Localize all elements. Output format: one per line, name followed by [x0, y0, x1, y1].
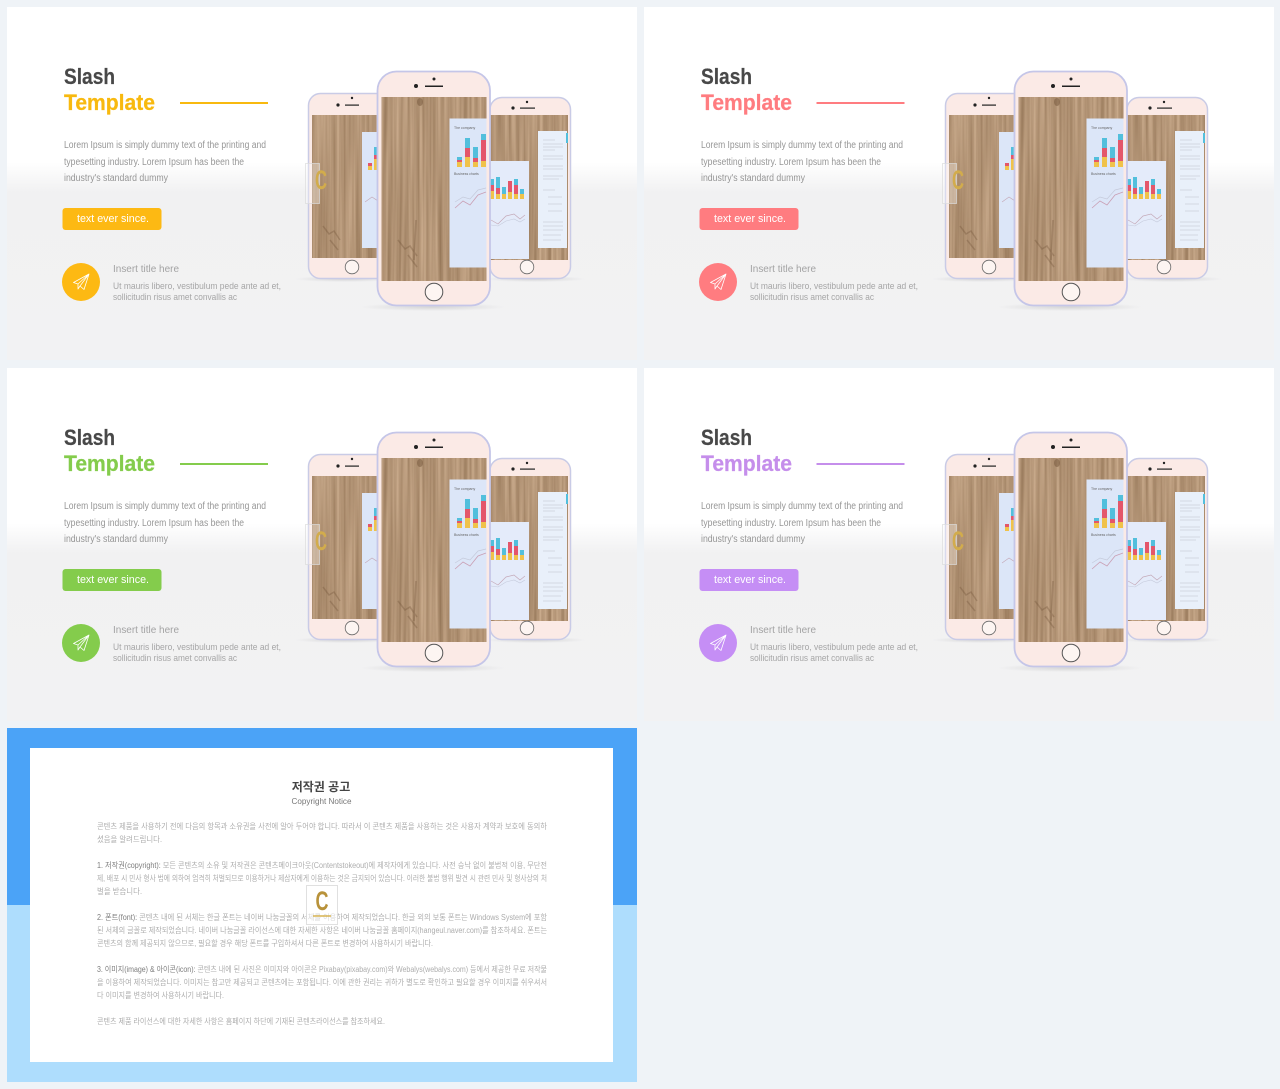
phone mockups [295, 432, 585, 672]
text: section 2 font: 콘텐츠의 함께 제공되지 않으므로, 필요할 경우 해당 폰트를 구입하셔서 다른 폰트로 변경하여 사용하시기 바랍니다. [97, 938, 433, 948]
heading: copyright notice: 저작권 공고 [292, 779, 350, 794]
icon: paper plane [62, 624, 100, 662]
body text: typesetting industry. Lorem Ipsum has been the [64, 518, 244, 529]
text: section 2 font: 2. 폰트(font): 콘텐츠 내에 된 서체는 한글 폰트는 네이버 나눔글꼴의 서체를 이용하여 제작되었습니다. 한글 외의 보통 폰트는 Windows System에 포함 [97, 912, 548, 922]
text: section 1 copyright [97, 860, 547, 896]
body text [701, 501, 903, 545]
button [62, 208, 162, 230]
caption text [750, 263, 918, 303]
body text: typesetting industry. Lorem Ipsum has been the [64, 157, 244, 168]
caption text: Insert title here [113, 263, 179, 275]
heading: Slash Template yellow [64, 64, 155, 115]
heading: Slash Template coral [701, 64, 792, 115]
icon: paper plane [699, 624, 737, 662]
button: text ever since. [714, 213, 786, 225]
panel: slide yellow [7, 7, 637, 360]
heading: Slash Template purple: Template [701, 451, 792, 476]
button: text ever since. [77, 213, 149, 225]
body text: industry's standard dummy [701, 173, 805, 184]
button: text ever since. [714, 574, 786, 586]
text: section 3 image and icon: 3. 이미지(image) & 아이콘(icon): 콘텐츠 내에 된 사진은 이미지와 아이콘은 Pixabay(pixabay.com)와 Webalys(webalys.com) 등에서 제공한 무료 저작물 [97, 964, 547, 974]
heading: Slash Template coral: Slash [701, 64, 752, 89]
text: introduction [97, 821, 548, 844]
body text: typesetting industry. Lorem Ipsum has been the [701, 157, 881, 168]
caption text: sollicitudin risus amet convallis ac [750, 653, 874, 664]
caption text: Ut mauris libero, vestibulum pede ante ad et, [750, 642, 918, 653]
text: section 1 copyright: 벌을 받습니다. [97, 886, 142, 896]
body text: industry's standard dummy [64, 534, 168, 545]
caption text [113, 624, 281, 664]
heading: Slash Template coral: Template [701, 90, 792, 115]
body text: Lorem Ipsum is simply dummy text of the printing and [701, 140, 903, 151]
caption text: Insert title here [113, 624, 179, 636]
body text: Lorem Ipsum is simply dummy text of the printing and [701, 501, 903, 512]
watermark logo: C [316, 886, 328, 916]
heading: Slash Template yellow: Template [64, 90, 155, 115]
caption text: Ut mauris libero, vestibulum pede ante ad et, [113, 642, 281, 653]
button [700, 569, 798, 591]
text: introduction: 콘텐츠 제품을 사용하기 전에 다음의 항목과 소유권을 사전에 알아 두어야 합니다. 따라서 이 콘텐츠 제품을 사용하는 것은 사용자 계약과 보호에 동의하 [97, 821, 548, 831]
phone mockups [295, 72, 585, 311]
panel: copyright notice [7, 728, 637, 1082]
body text: Lorem Ipsum is simply dummy text of the printing and [64, 501, 266, 512]
watermark logo [306, 886, 338, 924]
body text: industry's standard dummy [701, 534, 805, 545]
accent line [816, 102, 904, 104]
heading: Slash Template purple: Slash [701, 425, 752, 450]
accent line [816, 463, 904, 465]
panel: slide purple [644, 368, 1274, 721]
phone mockups [932, 72, 1222, 311]
body text [64, 140, 266, 184]
heading: Slash Template green: Slash [64, 425, 115, 450]
text: license note: 콘텐츠 제품 라이선스에 대한 자세한 사항은 홈페이지 하단에 기재된 콘텐츠라이선스를 참조하세요. [97, 1016, 385, 1026]
caption text [750, 624, 918, 664]
caption text [113, 263, 281, 303]
caption text: Ut mauris libero, vestibulum pede ante ad et, [750, 281, 918, 292]
text: section 3 image and icon: 다 이미지를 변경하여 사용하시기 바랍니다. [97, 990, 224, 1000]
heading: Slash Template purple [701, 425, 792, 476]
caption text: Insert title here [750, 263, 816, 275]
text: section 1 copyright: 제, 배포 시 민사 형사 법에 의하여 엄격히 처벌되므로 이용하거나 제삼자에게 이용하는 것은 금지되어 있습니다. 이러한 불법 행위 발견 시 관련 민사 및 형사상의 처 [97, 873, 547, 883]
body text [701, 140, 903, 184]
caption text: Ut mauris libero, vestibulum pede ante ad et, [113, 281, 281, 292]
button: text ever since. [77, 574, 149, 586]
caption text: sollicitudin risus amet convallis ac [113, 292, 237, 303]
text: section 2 font: 된 서체의 글꼴로 제작되었습니다. 네이버 나눔글꼴 라이선스에 대한 자세한 사항은 네이버 나눔글꼴 홈페이지(hangeul.naver.com)를 참조하세요. 폰트는 [97, 925, 547, 935]
caption text: sollicitudin risus amet convallis ac [113, 653, 237, 664]
accent line [180, 463, 268, 465]
button [700, 208, 798, 230]
body text: Lorem Ipsum is simply dummy text of the printing and [64, 140, 266, 151]
caption text: sollicitudin risus amet convallis ac [750, 292, 874, 303]
panel: slide coral [644, 7, 1274, 360]
icon: paper plane [62, 263, 100, 301]
heading: copyright notice [292, 779, 352, 806]
heading: Slash Template yellow: Slash [64, 64, 115, 89]
phone mockups [932, 432, 1222, 672]
text: section 3 image and icon: 을 이용하여 제작되었습니다. 이미지는 참고만 제공되고 콘텐츠에는 포함됩니다. 이에 관한 권리는 귀하가 별도로 확인하고 필요할 경우 이미지를 쉬우셔서 [97, 977, 547, 987]
button [62, 569, 162, 591]
heading: Slash Template green: Template [64, 451, 155, 476]
accent line [180, 102, 268, 104]
text: section 2 font [97, 912, 548, 948]
text: introduction: 셨음을 알려드립니다. [97, 834, 162, 844]
caption text: Insert title here [750, 624, 816, 636]
body text [64, 501, 266, 545]
heading: copyright notice: Copyright Notice [292, 796, 352, 806]
text: section 3 image and icon [97, 964, 547, 1000]
body text: typesetting industry. Lorem Ipsum has been the [701, 518, 881, 529]
icon: paper plane [699, 263, 737, 301]
body text: industry's standard dummy [64, 173, 168, 184]
text: section 1 copyright: 1. 저작권(copyright): 모든 콘텐츠의 소유 및 저작권은 콘텐츠메이크아웃(Contentstokeout)에 제작자에게 있습니다. 사전 승낙 없이 불법적 이용, 무단전 [97, 860, 547, 870]
heading: Slash Template green [64, 425, 155, 476]
panel: slide green [7, 368, 637, 721]
